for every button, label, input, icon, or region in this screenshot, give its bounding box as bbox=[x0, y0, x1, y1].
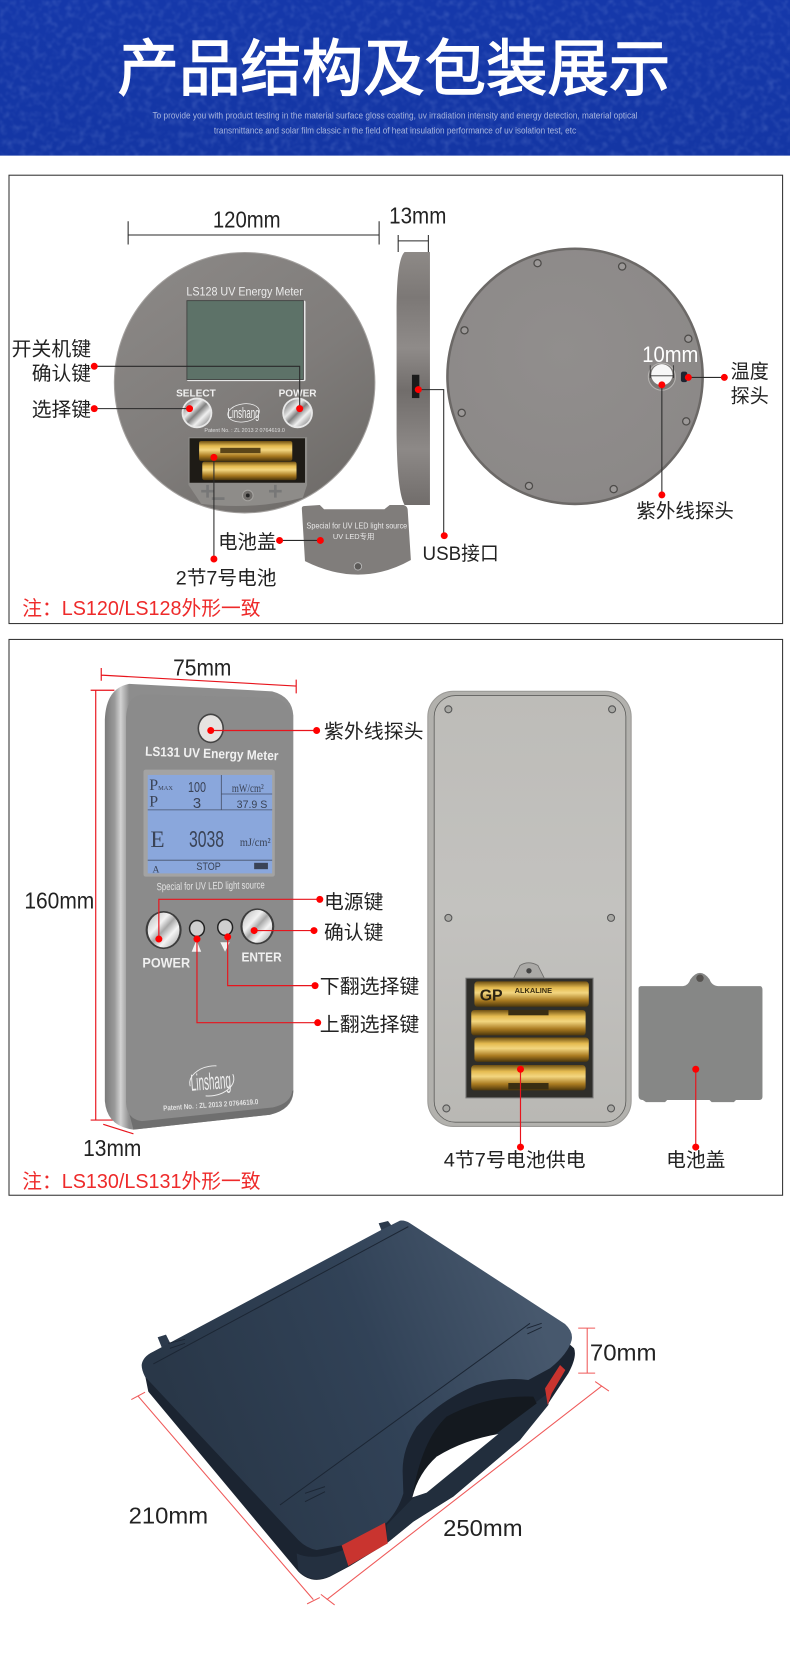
callout: UV probe: 紫外线探头 bbox=[324, 721, 424, 743]
dimension: 210mm bbox=[129, 1392, 320, 1604]
callout: power and confirm key bbox=[12, 339, 303, 412]
callout: confirm key: 确认键 bbox=[324, 922, 383, 944]
subtitle: To provide you with product testing in the material surface gloss coating, uv irradiation intensity and energy detection, material optical bbox=[152, 111, 638, 121]
callout: power key: 电源键 bbox=[324, 891, 383, 913]
meter front bbox=[105, 684, 293, 1130]
probe window bbox=[198, 714, 224, 743]
patent: Patent No. : ZL 2013 2 0764619.0 bbox=[204, 428, 285, 434]
callout: confirm key bbox=[251, 922, 383, 944]
case lid bbox=[142, 1221, 572, 1550]
subtitle bbox=[152, 111, 638, 135]
dimension: 70mm bbox=[578, 1328, 657, 1373]
note: 注：LS130/LS131外形一致 bbox=[22, 1170, 261, 1193]
tagline: Special for UV LED light source bbox=[157, 879, 265, 893]
POWER button: POWER bbox=[142, 956, 190, 971]
cover screw hole bbox=[696, 975, 704, 982]
POWER button bbox=[142, 911, 190, 971]
dimension: 13mm bbox=[389, 202, 446, 252]
handle opening shadow bbox=[412, 1397, 537, 1497]
battery cover: UV LED专用 bbox=[333, 531, 374, 541]
battery bay: GP bbox=[480, 987, 503, 1004]
callout: USB port bbox=[415, 386, 499, 565]
UV probe window bbox=[648, 363, 675, 390]
LCD display: 3038 bbox=[189, 826, 224, 852]
brand logo: Linshang bbox=[228, 406, 259, 422]
POWER button bbox=[279, 388, 317, 428]
meter back with batteries bbox=[428, 691, 631, 1126]
ENTER button bbox=[240, 908, 282, 964]
handle bar bbox=[387, 1392, 550, 1543]
temperature probe socket bbox=[681, 372, 687, 382]
model name: LS128 UV Energy Meter bbox=[186, 284, 303, 298]
dimension: 160mm: 160mm bbox=[24, 887, 94, 913]
battery compartment bbox=[188, 437, 307, 506]
callout: temperature probe: 探头 bbox=[731, 385, 769, 407]
callout: select key bbox=[32, 399, 193, 421]
dimension: 75mm bbox=[101, 654, 296, 693]
case hinges bbox=[158, 1221, 395, 1347]
title: 产品结构及包装展示 bbox=[118, 35, 670, 104]
LCD display: 3 bbox=[193, 796, 201, 812]
callout: UV probe bbox=[636, 381, 734, 523]
round meter front bbox=[114, 252, 375, 513]
meter front: Linshang bbox=[190, 1067, 232, 1096]
callout: temperature probe: 温度 bbox=[731, 361, 769, 383]
dimension: 210mm: 210mm bbox=[129, 1502, 208, 1528]
dimension: 120mm bbox=[128, 207, 379, 245]
up and down keys bbox=[190, 919, 233, 952]
carrying case bbox=[142, 1221, 575, 1580]
latch: front bbox=[342, 1523, 388, 1566]
battery bay: ALKALINE bbox=[515, 986, 552, 995]
dimension: 13mm: 13mm bbox=[389, 202, 446, 228]
callout: UV probe: 紫外线探头 bbox=[636, 501, 734, 523]
callout: power and confirm key: 确认键 bbox=[32, 363, 91, 385]
dimension: 75mm: 75mm bbox=[173, 654, 231, 680]
LCD display: P bbox=[149, 794, 158, 811]
LCD display: 37.9 S bbox=[237, 799, 267, 811]
callout: four AAA batteries: 4节7号电池供电 bbox=[444, 1150, 586, 1172]
LCD screen bbox=[187, 301, 306, 381]
panel: LS128 round meter bbox=[9, 175, 783, 624]
callout: USB port: USB接口 bbox=[423, 543, 499, 565]
callout: select key: 选择键 bbox=[32, 399, 91, 421]
LCD display: E bbox=[150, 827, 165, 853]
LCD display: STOP bbox=[196, 861, 221, 873]
note: 注：LS120/LS128外形一致 bbox=[22, 597, 261, 620]
lid seam lines bbox=[153, 1227, 542, 1505]
handle opening background bbox=[412, 1434, 498, 1497]
LCD display: PMAX bbox=[149, 777, 173, 794]
model name: LS131 UV Energy Meter bbox=[145, 744, 279, 763]
ENTER button: ENTER bbox=[241, 949, 282, 964]
SELECT button: SELECT bbox=[176, 388, 217, 399]
LCD display: mJ/cm² bbox=[240, 836, 271, 849]
battery bay bbox=[466, 963, 593, 1098]
SELECT button bbox=[176, 388, 217, 428]
meter back bbox=[447, 249, 703, 504]
callout: page up key bbox=[193, 936, 419, 1036]
dimension: 250mm: 250mm bbox=[443, 1515, 523, 1541]
callout: power and confirm key: 开关机键 bbox=[12, 339, 91, 361]
callout: page up key: 上翻选择键 bbox=[320, 1014, 419, 1036]
brand logo bbox=[187, 1062, 236, 1099]
callout: battery cover bbox=[666, 1066, 725, 1172]
dimension: 160mm bbox=[24, 690, 114, 1120]
dimension: 13mm: 13mm bbox=[83, 1135, 141, 1161]
battery cover: Special for UV LED light source bbox=[307, 520, 407, 530]
subtitle: transmittance and solar film classic in the field of heat insulation performance of uv isolation test, etc bbox=[214, 125, 576, 135]
callout: two AAA batteries bbox=[176, 454, 276, 589]
brand logo bbox=[227, 402, 261, 424]
LCD display: mW/cm² bbox=[232, 782, 264, 795]
LCD display: A bbox=[152, 865, 159, 875]
POWER button: POWER bbox=[279, 388, 317, 399]
callout: four AAA batteries bbox=[444, 1066, 586, 1172]
callout: page down key: 下翻选择键 bbox=[320, 976, 419, 998]
dimension: 10mm: 10mm bbox=[642, 342, 698, 367]
callout: battery cover: 电池盖 bbox=[218, 531, 276, 553]
dimension: 120mm: 120mm bbox=[213, 207, 281, 233]
callout: battery cover bbox=[218, 531, 324, 553]
LCD display bbox=[143, 770, 275, 877]
lower shell band bbox=[297, 1550, 348, 1579]
dimension: 70mm: 70mm bbox=[590, 1339, 657, 1365]
dimension: 250mm bbox=[321, 1382, 609, 1605]
case lower body bbox=[144, 1342, 575, 1580]
callout: power key bbox=[155, 891, 383, 943]
callout: battery cover: 电池盖 bbox=[666, 1150, 725, 1172]
loose battery cover bbox=[639, 973, 762, 1102]
patent: Patent No. : ZL 2013 2 0764619.0 bbox=[163, 1097, 259, 1113]
callout: UV probe bbox=[207, 721, 424, 743]
header banner bbox=[0, 0, 790, 156]
panel: LS131 rectangular meter bbox=[9, 639, 783, 1195]
dimension: 13mm bbox=[83, 1124, 141, 1161]
battery cover bbox=[302, 505, 411, 575]
latch: right bbox=[545, 1365, 565, 1405]
callout: two AAA batteries: 2节7号电池 bbox=[176, 567, 276, 589]
LCD display: 100 bbox=[188, 780, 206, 796]
meter side view bbox=[397, 252, 430, 505]
callout: page down key bbox=[224, 933, 419, 998]
callout: temperature probe bbox=[685, 361, 769, 407]
